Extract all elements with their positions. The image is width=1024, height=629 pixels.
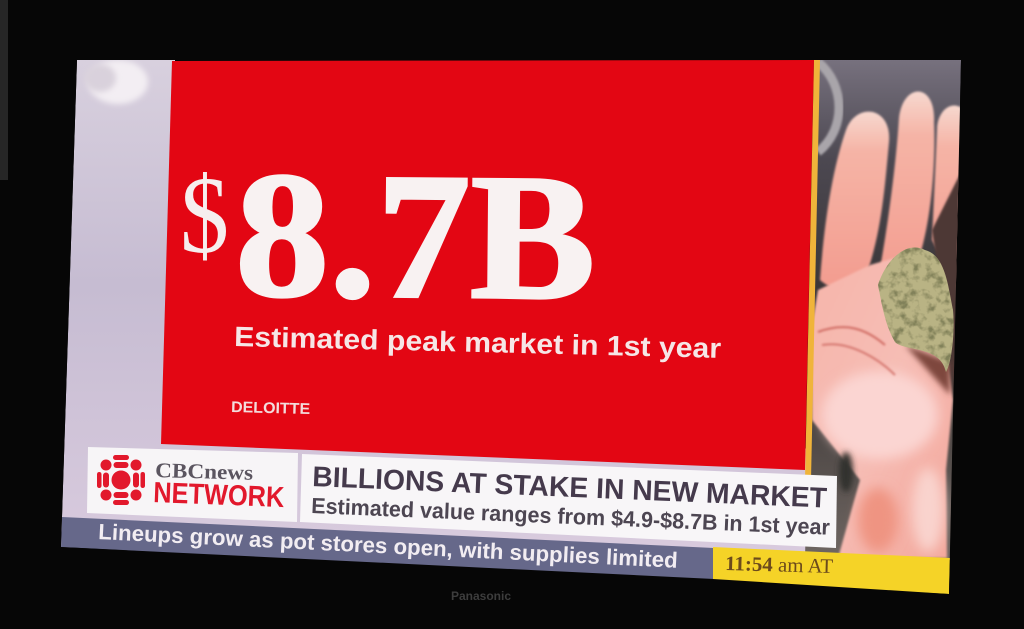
- sub headline: Estimated value ranges from $4.9-$8.7B in 1st year: [311, 493, 831, 540]
- background ring: [818, 62, 839, 152]
- logo word: network: NETWORK: [153, 477, 285, 514]
- headline value: 8.7B: [235, 135, 596, 337]
- yellow divider: [805, 60, 820, 480]
- ticker text: Lineups grow as pot stores open, with supplies limited: [98, 519, 678, 573]
- ticker bar: [61, 517, 714, 579]
- headline box: [300, 454, 837, 548]
- left lavender background: [61, 60, 840, 560]
- logo word: cbcnews: CBCnews: [155, 458, 253, 485]
- cannabis bud: [878, 248, 954, 372]
- source: DELOITTE: [231, 399, 310, 418]
- CBC logo box: [87, 447, 298, 522]
- clock text: 11:54 am AT: [725, 553, 834, 578]
- hand: [811, 91, 962, 558]
- dollar sign: $: [180, 154, 229, 276]
- icon: CBC gem: [97, 455, 145, 505]
- right photo: hand holding bud: [805, 60, 962, 560]
- subtitle: Estimated peak market in 1st year: [234, 321, 722, 364]
- headline text: BILLIONS AT STAKE IN NEW MARKET: [312, 461, 828, 515]
- red panel: [161, 60, 820, 480]
- clock panel: [713, 547, 950, 594]
- screen: [61, 60, 962, 594]
- brand label: Panasonic: [451, 589, 511, 603]
